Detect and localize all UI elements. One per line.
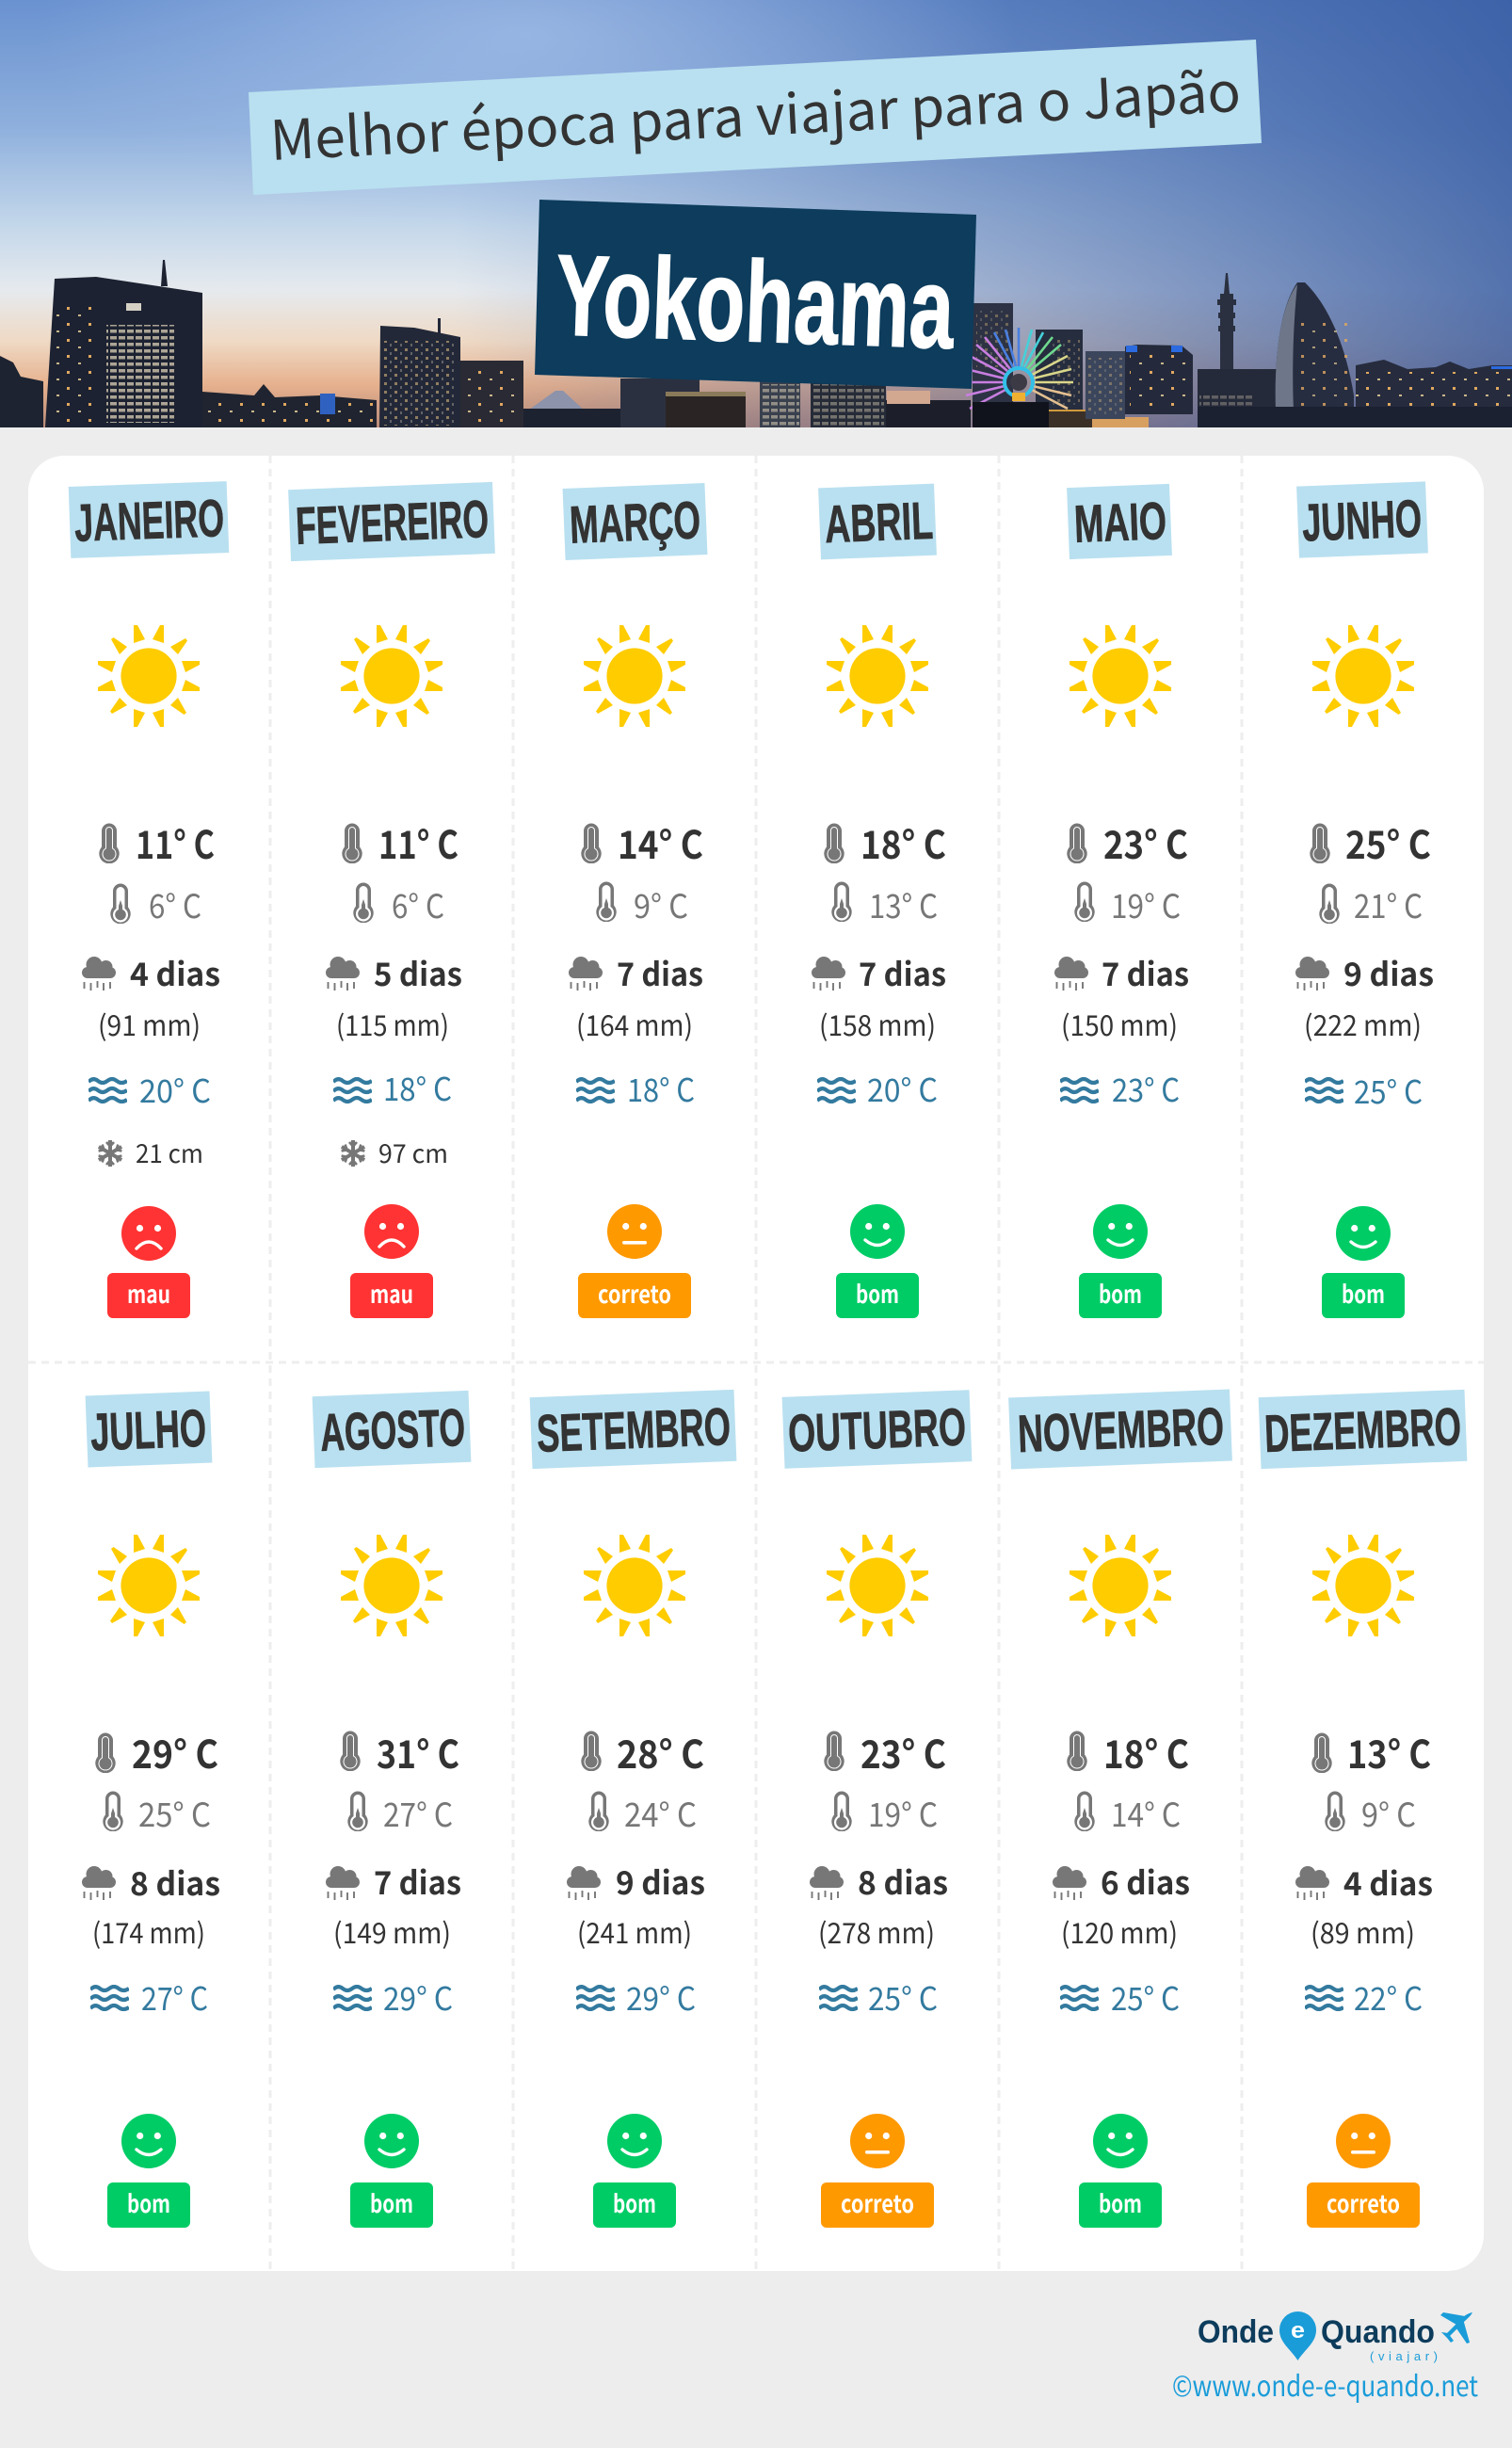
rain days: 4 dias: [1343, 1859, 1433, 1905]
month panel: Setembro: [530, 1390, 736, 2228]
max temperature: [1311, 1723, 1431, 1780]
max temperature: 11° C: [378, 813, 458, 870]
rating badge: bom: [613, 2185, 656, 2220]
month heading: [69, 481, 229, 558]
right towers behind wheel: [973, 303, 1013, 407]
logo: Onde e Quando: [1198, 2311, 1472, 2363]
icon: sad face: [364, 1204, 419, 1259]
sail-shaped hotel: [1276, 282, 1354, 411]
min temperature: 6° C: [149, 880, 201, 928]
sea temperature: [817, 1065, 938, 1111]
month heading: [782, 1390, 972, 1469]
rain days: [1053, 1858, 1190, 1904]
min temperature: [831, 880, 938, 928]
rating badge: bom: [370, 2185, 413, 2220]
month heading: JULHO: [89, 1398, 207, 1461]
snowfall: 21 cm: [136, 1134, 203, 1170]
rainfall: (150 mm): [1061, 1003, 1178, 1044]
banner: city name: [535, 200, 976, 389]
centre buildings: [523, 409, 627, 427]
month panel: Novembro: [1008, 1390, 1232, 2228]
panel: calendar card: [28, 456, 1484, 2271]
rating badge: mau: [127, 1276, 170, 1311]
icon: happy face: [1093, 1204, 1148, 1259]
rain days: 7 dias: [1102, 949, 1189, 995]
month panel: Março: [563, 483, 707, 1318]
rain days: 6 dias: [1101, 1858, 1190, 1904]
month panel: Janeiro: [69, 481, 229, 1318]
min temperature: [1319, 880, 1423, 928]
icon: happy face: [121, 2114, 176, 2168]
rainfall: (91 mm): [98, 1003, 201, 1044]
month panel: Outubro: [782, 1390, 972, 2228]
icon: sun: [584, 625, 685, 727]
max temperature: 13° C: [1347, 1723, 1431, 1780]
sea temperature: 18° C: [627, 1065, 695, 1111]
month heading: [86, 1391, 212, 1468]
sea temperature: 25° C: [868, 1973, 938, 2020]
low buildings left: [202, 384, 377, 427]
rating badge: [350, 1273, 433, 1318]
max temperature: [824, 813, 946, 870]
rating badge: bom: [1099, 1276, 1142, 1311]
rain days: [326, 949, 462, 995]
min temperature: 6° C: [392, 880, 444, 928]
icon: sun: [827, 1535, 928, 1636]
min temperature: [347, 1789, 453, 1837]
min temperature: [353, 880, 444, 928]
max temperature: 14° C: [618, 813, 703, 870]
rain days: [810, 1858, 948, 1904]
month heading: [1008, 1390, 1232, 1469]
month heading: ABRIL: [824, 491, 934, 554]
big office tower: [45, 277, 202, 427]
rainfall: (120 mm): [1061, 1910, 1178, 1952]
rain days: [812, 949, 946, 995]
rain days: [569, 949, 703, 995]
rain days: [82, 949, 220, 995]
rain days: 9 dias: [1343, 949, 1434, 995]
rating badge: [107, 1273, 190, 1318]
rain days: [82, 1859, 220, 1905]
min temperature: [831, 1789, 938, 1837]
mid right buildings: [1086, 351, 1125, 419]
sea temperature: [819, 1973, 938, 2020]
min temperature: 24° C: [624, 1789, 697, 1837]
month heading: MAIO: [1073, 491, 1167, 554]
sea temperature: [1305, 1973, 1423, 2020]
ferris wheel: [964, 328, 1073, 409]
sea temperature: 20° C: [139, 1066, 211, 1112]
rating badge: [821, 2182, 934, 2228]
rain days: [1054, 949, 1189, 995]
sea temperature: [333, 1973, 453, 2020]
icon: sun: [1070, 625, 1171, 727]
max temperature: [581, 1723, 704, 1780]
max temperature: 18° C: [1103, 1723, 1189, 1780]
rain days: 7 dias: [859, 949, 946, 995]
rating badge: correto: [841, 2185, 914, 2220]
snowfall: [97, 1134, 203, 1170]
rating badge: [1079, 1273, 1162, 1318]
min temperature: 25° C: [138, 1789, 211, 1837]
min temperature: [588, 1789, 697, 1837]
month panel: Fevereiro: [288, 482, 495, 1318]
rating badge: correto: [1327, 2185, 1400, 2220]
rating badge: [1079, 2182, 1162, 2228]
icon: happy face: [1093, 2114, 1148, 2168]
month heading: [1296, 481, 1428, 558]
max temperature: 18° C: [861, 813, 946, 870]
min temperature: 21° C: [1354, 880, 1423, 928]
min temperature: [110, 880, 201, 928]
month panel: Maio: [1054, 484, 1189, 1318]
icon: sun: [341, 625, 442, 727]
rating badge: bom: [856, 1276, 899, 1311]
month panel: Agosto: [313, 1391, 471, 2228]
rating badge: correto: [598, 1276, 671, 1311]
rain days: [1295, 949, 1434, 995]
rain days: [567, 1858, 705, 1904]
month heading: JUNHO: [1301, 489, 1423, 552]
month heading: [563, 483, 707, 560]
icon: sun: [98, 625, 200, 727]
dark building below wheel: [973, 402, 1049, 427]
snowfall: 97 cm: [378, 1134, 448, 1170]
icon: happy face: [1336, 1206, 1391, 1261]
rainfall: (115 mm): [336, 1003, 449, 1044]
max temperature: 31° C: [377, 1723, 459, 1780]
min temperature: 14° C: [1111, 1789, 1181, 1837]
min temperature: [596, 880, 688, 928]
rating badge: [836, 1273, 919, 1318]
rainfall: (222 mm): [1304, 1003, 1422, 1044]
icon: neutral face: [607, 1204, 662, 1259]
rain days: [326, 1858, 461, 1904]
rating badge: bom: [127, 2185, 170, 2220]
icon: sun: [584, 1535, 685, 1636]
min temperature: [1325, 1789, 1416, 1837]
Mount Fuji: [525, 391, 587, 412]
sea temperature: [90, 1973, 208, 2020]
max temperature: 23° C: [1103, 813, 1188, 870]
rainfall: (174 mm): [92, 1910, 205, 1952]
rating badge: [1307, 2182, 1420, 2228]
icon: sun: [1312, 1535, 1414, 1636]
month heading: [313, 1391, 471, 1468]
min temperature: [1074, 1789, 1181, 1837]
sea temperature: [1305, 1067, 1423, 1113]
rain days: 7 dias: [374, 1858, 461, 1904]
month heading: [1067, 484, 1172, 559]
max temperature: [1067, 1723, 1189, 1780]
second tower: [379, 326, 460, 427]
month heading: MARÇO: [569, 490, 701, 555]
icon: happy face: [850, 1204, 905, 1259]
banner: city name: Yokohama: [554, 231, 957, 373]
max temperature: 11° C: [136, 813, 215, 870]
rainfall: (164 mm): [576, 1003, 693, 1044]
max temperature: [1310, 813, 1431, 870]
min temperature: 9° C: [634, 880, 688, 928]
sea temperature: 20° C: [867, 1065, 938, 1111]
month heading: [288, 482, 495, 561]
rainfall: (149 mm): [333, 1910, 451, 1952]
rating badge: [1322, 1273, 1405, 1318]
month heading: [818, 484, 937, 559]
month heading: NOVEMBRO: [1017, 1396, 1225, 1463]
logo: Onde e Quando: Quando: [1321, 2314, 1435, 2350]
month panel: Abril: [812, 484, 946, 1318]
sea temperature: 25° C: [1111, 1973, 1180, 2020]
max temperature: [581, 813, 703, 870]
rain days: 9 dias: [616, 1858, 705, 1904]
min temperature: [103, 1789, 211, 1837]
max temperature: 25° C: [1345, 813, 1431, 870]
rain days: 4 dias: [130, 949, 220, 995]
min temperature: [1074, 880, 1181, 928]
rain days: [1295, 1859, 1433, 1905]
sea temperature: 23° C: [1112, 1065, 1180, 1111]
sea temperature: 25° C: [1354, 1067, 1423, 1113]
icon: sun: [1070, 1535, 1171, 1636]
icon: sun: [827, 625, 928, 727]
month panel: Dezembro: [1259, 1390, 1467, 2228]
logo: Onde e Quando: e: [1291, 2318, 1305, 2343]
rainfall: (158 mm): [819, 1003, 936, 1044]
icon: happy face: [364, 2114, 419, 2168]
rating badge: [593, 2182, 676, 2228]
month panel: Julho: [82, 1391, 220, 2228]
max temperature: [824, 1723, 946, 1780]
sea temperature: [1060, 1973, 1180, 2020]
far left buildings: [0, 356, 43, 427]
icon: sun: [98, 1535, 200, 1636]
sea temperature: [576, 1973, 696, 2020]
month panel: Junho: [1295, 481, 1434, 1318]
sea temperature: 18° C: [383, 1064, 452, 1110]
banner: subtitle: Melhor época para viajar para o Japão: [268, 48, 1243, 176]
logo: Onde e Quando: (viajar): [1370, 2349, 1438, 2363]
max temperature: 29° C: [132, 1723, 218, 1780]
icon: sad face: [121, 1206, 176, 1261]
rating badge: bom: [1342, 1276, 1385, 1311]
rain days: 8 dias: [858, 1858, 948, 1904]
min temperature: 9° C: [1361, 1789, 1416, 1837]
rainfall: (89 mm): [1311, 1910, 1415, 1952]
icon: happy face: [607, 2114, 662, 2168]
month heading: SETEMBRO: [536, 1396, 732, 1463]
max temperature: [95, 1723, 218, 1780]
sea temperature: [576, 1065, 695, 1111]
icon: neutral face: [850, 2114, 905, 2168]
sea temperature: 22° C: [1354, 1973, 1423, 2020]
rating badge: mau: [370, 1276, 413, 1311]
sea temperature: [88, 1066, 211, 1112]
rating badge: [107, 2182, 190, 2228]
icon: neutral face: [1336, 2114, 1391, 2168]
min temperature: 27° C: [383, 1789, 453, 1837]
min temperature: 19° C: [868, 1789, 938, 1837]
sea temperature: [333, 1064, 452, 1110]
month heading: OUTUBRO: [787, 1396, 967, 1463]
min temperature: 19° C: [1111, 880, 1181, 928]
icon: sun: [1312, 625, 1414, 727]
rainfall: (278 mm): [818, 1910, 935, 1952]
sea temperature: 29° C: [626, 1973, 696, 2020]
max temperature: [340, 1723, 459, 1780]
rainfall: (241 mm): [577, 1910, 692, 1952]
sea temperature: [1060, 1065, 1180, 1111]
month heading: AGOSTO: [319, 1397, 466, 1462]
landmark tower: [1217, 273, 1236, 375]
sea temperature: 29° C: [383, 1973, 453, 2020]
max temperature: 28° C: [617, 1723, 704, 1780]
rating badge: [350, 2182, 433, 2228]
month heading: FEVEREIRO: [295, 489, 490, 556]
snowfall: [340, 1134, 448, 1170]
rating badge: [578, 1273, 691, 1318]
max temperature: 23° C: [861, 1723, 946, 1780]
rain days: 7 dias: [617, 949, 703, 995]
logo: Onde e Quando: Onde: [1198, 2314, 1274, 2350]
sea temperature: 27° C: [141, 1973, 208, 2020]
rain days: 5 dias: [374, 949, 462, 995]
max temperature: [342, 813, 458, 870]
rain days: 8 dias: [130, 1859, 220, 1905]
max temperature: [1067, 813, 1188, 870]
min temperature: 13° C: [869, 880, 938, 928]
far right buildings: [1356, 360, 1512, 427]
month heading: [530, 1390, 736, 1469]
rating badge: bom: [1099, 2185, 1142, 2220]
icon: plane: [1440, 2312, 1472, 2343]
icon: location pin: [1279, 2311, 1316, 2360]
icon: sun: [341, 1535, 442, 1636]
header photo: Yokohama skyline at dusk: [0, 0, 1512, 427]
max temperature: [99, 813, 215, 870]
month heading: JANEIRO: [73, 488, 225, 553]
